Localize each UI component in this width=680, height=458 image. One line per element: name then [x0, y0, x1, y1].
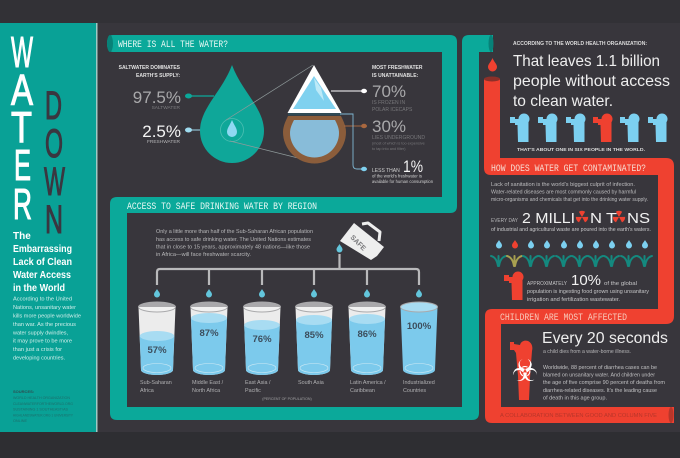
glass: Industrialized 100%: [400, 302, 438, 375]
panel: freshwater stats: (most of which is too expensive: [372, 142, 425, 146]
icon: child with biohazard: ☣: [512, 354, 538, 389]
title: DOWN: [44, 84, 65, 242]
icon: red drop: [488, 58, 497, 72]
drops row: [496, 240, 648, 248]
stat: 10 percent: population is ingesting food grown using unsanitary: [527, 289, 649, 295]
headline: every 20 seconds: Every 20 seconds: [542, 330, 668, 347]
glass: Sub-Saharan Africa 57%: [138, 302, 176, 375]
heading: where is all the water: WHERE IS ALL THE WATER?: [118, 40, 228, 51]
intro text: than just a crisis for: [13, 347, 62, 353]
title: DOWN: W: [44, 160, 65, 204]
sources: WORLD HEALTH ORGANIZATION: [13, 396, 70, 400]
region labels: Africa: [140, 388, 154, 394]
connector: freshwater: [185, 128, 226, 132]
connector: underground: [344, 124, 367, 128]
icon: safe jug: [340, 223, 384, 260]
headline: 1.1 billion: to clean water.: [513, 93, 613, 110]
plants row: [491, 256, 652, 266]
connector: saltwater: [185, 94, 214, 98]
sources: CLEANWATERFORTHEWORLD.ORG: [13, 402, 73, 406]
panel: freshwater stats: POLAR ICECAPS: [372, 107, 413, 113]
stat: 10 percent: 10%: [571, 272, 601, 289]
water drops: [154, 244, 422, 298]
region labels: Pacific: [245, 388, 261, 394]
stat: 2 million tons: EVERY DAY: [491, 218, 519, 224]
panel: freshwater stats: to tap into and filter): [372, 147, 406, 151]
headline: 1.1 billion: people without access: [513, 73, 670, 90]
intro text: water supply dwindles,: [12, 330, 68, 336]
children text: diarrhea-related diseases. It's the leading cause: [543, 388, 657, 394]
glass: East Asia 76%: 76%: [252, 334, 272, 345]
title: WATER: [11, 28, 33, 229]
chart note: (PERCENT OF POPULATION): [262, 397, 312, 401]
glass: Latin America 86%: 86%: [357, 329, 377, 340]
title: WATER: W: [11, 28, 33, 77]
heading: contamination: HOW DOES WATER GET CONTAMINATED?: [491, 164, 646, 175]
title: DOWN: O: [45, 122, 63, 166]
connector: ice: [331, 89, 367, 93]
WHO lead-in: ACCORDING TO THE WORLD HEALTH ORGANIZATION:: [513, 41, 647, 47]
intro text: kills more people worldwide: [13, 314, 81, 320]
panel: freshwater stats: available for human consumption: [372, 179, 434, 184]
panel: saltwater stats: SALTWATER DOMINATES: [119, 65, 181, 71]
sources: SUSTAINING 1 SOUTHEAST/AS: [13, 408, 69, 412]
title: WATER: A: [11, 66, 33, 115]
icon: red person drinking: [504, 272, 524, 300]
sources: [13, 389, 74, 423]
stat: 2 million tons: [491, 209, 650, 227]
glass: Industrialized 100%: 100%: [407, 321, 432, 332]
subtitle: The: [13, 231, 31, 242]
stat: 2 million tons: N: [590, 210, 602, 227]
children text: [543, 365, 666, 402]
glass: East Asia 76%: [244, 302, 280, 375]
stat: 10 percent: APPROXIMATELY: [527, 281, 568, 287]
glass: Middle East 87%: [190, 302, 228, 375]
teal pipe frame: [107, 35, 494, 420]
caption: one in six: THAT'S ABOUT ONE IN SIX PEOPLE IN THE WORLD.: [517, 147, 645, 153]
intro text: [12, 296, 81, 362]
glass: Latin America 86%: [348, 302, 386, 375]
panel: freshwater stats: [372, 65, 434, 184]
subtitle: Embarrassing: [13, 244, 72, 255]
contamination text: micro-organisms and chemicals that get into the drinking water supply.: [491, 197, 648, 203]
footer credit: A COLLABORATION BETWEEN GOOD AND COLUMN FIVE: [500, 413, 658, 419]
title: WATER: R: [13, 180, 32, 229]
intro text: developing countries.: [13, 356, 65, 362]
region labels: North Africa: [192, 388, 220, 394]
region labels: South Asia: [298, 380, 324, 386]
headline: 1.1 billion: That leaves 1.1 billion: [513, 53, 660, 70]
headline: 1.1 billion: [513, 53, 670, 110]
subtitle: in the World: [13, 283, 65, 294]
icon row: one in six people: [510, 114, 668, 142]
region intro text: Only a little more than half of the Sub-Saharan African population: [156, 229, 313, 235]
contamination text: Lack of sanitation is the world's biggest culprit of infection.: [491, 182, 635, 188]
contamination text: Water-related diseases are most commonly caused by harmful: [491, 190, 636, 196]
intro text: it may prove to be more: [13, 338, 72, 344]
zoom lines: [226, 65, 313, 161]
stat: 2 million tons: 2 MILLI: [522, 210, 575, 227]
panel: saltwater stats: FRESHWATER: [147, 139, 181, 145]
distribution pipes: [157, 254, 419, 285]
region labels: Countries: [403, 388, 426, 394]
panel: freshwater stats: LESS THAN: [372, 168, 400, 174]
heading: children: CHILDREN ARE MOST AFFECTED: [500, 313, 627, 324]
title: DOWN: D: [45, 84, 62, 128]
children text: of death in this age group.: [543, 396, 607, 402]
glass: Middle East 87%: 87%: [199, 328, 219, 339]
panel: freshwater stats: 70%: [372, 82, 406, 101]
panel: saltwater stats: 2.5%: [142, 122, 181, 141]
stat: 2 million tons: T: [606, 210, 617, 227]
panel: freshwater stats: 30%: [372, 117, 406, 136]
stat: 10 percent: of the global: [604, 281, 637, 287]
glass: Sub-Saharan Africa 57%: 57%: [147, 345, 167, 356]
intro text: than war. As the precious: [13, 322, 76, 328]
panel: freshwater stats: MOST FRESHWATER: [372, 65, 423, 71]
panel: freshwater stats: of the world's freshwater is: [372, 174, 422, 178]
icon: safe jug: SAFE: [349, 234, 367, 253]
subtitle: Lack of Clean: [13, 257, 72, 268]
children text: Worldwide, 88 percent of diarrhea cases can be: [543, 365, 657, 371]
title: WATER: T: [11, 103, 32, 152]
intro text: Nations, unsanitary water: [13, 305, 76, 311]
region labels: Caribbean: [350, 388, 375, 394]
contamination text: [491, 182, 648, 203]
children text: blamed on unsanitary water. And children under: [543, 372, 655, 378]
panel: saltwater stats: 97.5%: [133, 88, 181, 107]
region labels: East Asia /: [245, 380, 271, 386]
region labels: Latin America /: [350, 380, 386, 386]
region intro text: that in close to 15 years, approximately 48 nations—like those: [156, 244, 310, 250]
stat: 10 percent: irrigation and fertilization wastewater.: [527, 297, 620, 303]
region intro text: has access to safe drinking water. The United Nations estimates: [156, 237, 311, 243]
region intro text: in Africa—will face freshwater scarcity.: [156, 252, 251, 258]
panel: freshwater stats: IS FROZEN IN: [372, 100, 405, 106]
panel: freshwater stats: LIES UNDERGROUND: [372, 135, 425, 141]
glass: South Asia 85%: 85%: [304, 330, 324, 341]
region labels: [140, 380, 435, 394]
stat: 2 million tons: NS: [627, 210, 650, 227]
heading: access to safe drinking water: ACCESS TO SAFE DRINKING WATER BY REGION: [127, 202, 317, 213]
child death caption: a child dies from a water-borne illness.: [543, 349, 631, 355]
panel: saltwater stats: [119, 65, 181, 145]
panel: saltwater stats: SALTWATER: [152, 105, 181, 111]
big drop icon: [200, 65, 264, 163]
iceberg and underground drop icon: [283, 65, 346, 164]
subtitle: [13, 231, 72, 294]
connector: available: [340, 114, 367, 171]
panel: freshwater stats: IS UNATTAINABLE:: [372, 73, 419, 79]
waste caption: of industrial and agricultural waste are poured into the earth's waters.: [491, 227, 651, 233]
region intro text: [156, 229, 313, 258]
intro text: According to the United: [13, 296, 72, 302]
stat: 10 percent: [527, 272, 649, 303]
glass: South Asia 85%: [296, 302, 332, 375]
panel: saltwater stats: EARTH'S SUPPLY:: [136, 73, 180, 79]
icon: child with biohazard: [510, 341, 538, 400]
sources: SOURCES:: [13, 389, 34, 394]
region labels: Sub-Saharan: [140, 380, 172, 386]
region labels: Industrialized: [403, 380, 435, 386]
sources: ONLINE: [13, 419, 28, 423]
children text: the age of five comprise 90 percent of deaths from: [543, 380, 666, 386]
panel: left title column: [0, 23, 98, 432]
region labels: Middle East /: [192, 380, 224, 386]
panel: freshwater stats: 1%: [403, 157, 423, 176]
subtitle: Water Access: [13, 270, 71, 281]
sources: HIGHLANDSWATER.ORG 1 UNIVERSITY: [13, 414, 74, 418]
title: WATER: E: [14, 141, 31, 190]
red pipe frame: [484, 76, 674, 423]
title: DOWN: N: [45, 198, 63, 242]
